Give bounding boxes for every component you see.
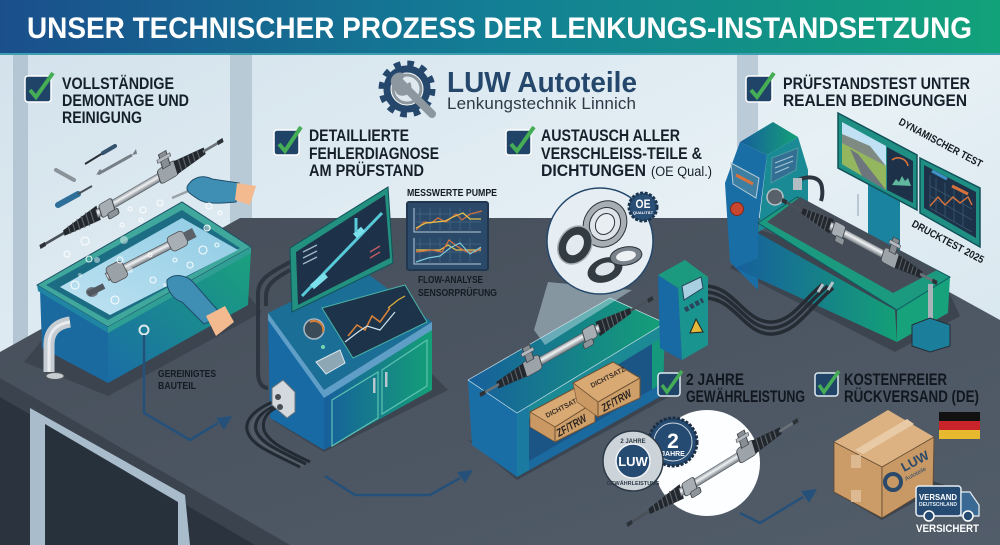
arrow: warranty to shipping [740,489,817,523]
logo wordmark: LUW Autoteile [447,67,637,99]
support stand [912,284,950,352]
illustration: workbench [468,278,672,480]
badge: OE quality: QUALITÄT [633,210,654,215]
text block: DICHTUNGEN [541,161,646,180]
bench right side [517,323,665,477]
text block: REALEN BEDINGUNGEN [783,91,967,110]
console screen [322,285,427,358]
text block: GEWÄHRLEISTUNG [686,387,805,406]
badge: 2 years: 2 [667,430,679,453]
gloved hand in water [167,276,234,336]
water [60,218,238,315]
illustration: disassembled steering rack [34,121,226,258]
icon: checkbox [746,73,774,102]
title bar [0,0,1000,55]
bubbles [64,200,222,304]
parts box: DICHTSATZ [590,366,627,390]
monitor stand [868,180,900,280]
label: flow analysis: FLOW-ANALYSE [418,274,483,286]
illustration: monitors on test bench [838,113,986,266]
pillar: right [737,55,758,225]
arrow: tank to diagnostics [140,326,232,440]
bench top [468,298,665,413]
icon: checkbox [815,371,839,396]
tank rim [37,202,251,327]
steering rack [621,400,801,536]
parts box [573,362,640,417]
chart panel: pump values [407,187,497,299]
box logo [885,447,932,490]
text block: AUSTAUSCH ALLER [541,126,680,145]
loose fitting [86,286,104,297]
illustration: hydraulic pump unit [658,260,708,360]
bench body [735,233,897,342]
box logo: Autoteile [904,466,928,483]
text block: FEHLERDIAGNOSE [309,144,439,163]
cables [247,400,310,467]
badge: OE quality [629,193,657,221]
text block: 2 JAHRE [686,370,744,389]
spindle [767,189,783,205]
badge: OE quality: OE [636,197,650,211]
icon: German flag [939,412,980,439]
parts box: DICHTSATZ [545,396,582,420]
gauge [304,319,324,339]
bench left side [468,380,517,477]
arrow: diagnostics to workbench [325,470,473,495]
icon: delivery truck [916,486,979,535]
gauge arrow [857,194,859,216]
icon: bearing [574,193,636,255]
text block: (OE Qual.) [651,164,712,179]
pillar: left [13,55,28,367]
step 6: return shipping label [815,370,979,406]
logo: LUW Autoteile [382,64,637,114]
step 2: label [274,126,439,180]
label: pressure test: DRUCKTEST 2025 [910,218,986,266]
badge: 2 years: JAHRE [661,451,685,458]
badge: LUW warranty: 2 JAHRE [620,439,646,445]
parts box: ZF/TRW [554,412,590,440]
pillar: centre left [230,55,252,245]
tower screens [731,163,759,198]
illustration: tools above tank [56,146,137,205]
hose connectors [818,282,833,292]
icon: checkbox [506,127,534,155]
tower top [740,122,798,155]
label: insured: VERSICHERT [916,523,979,535]
label: pump readings: MESSWERTE PUMPE [407,187,497,199]
label: flow analysis: SENSORPRÜFUNG [418,286,497,299]
badge: LUW warranty: LUW [618,454,649,469]
console doors [332,340,427,446]
badge: LUW warranty [603,431,663,491]
tank side left [40,290,108,383]
monitor: pressure test [920,158,980,247]
label: dynamic test: DYNAMISCHER TEST [897,116,985,171]
tower right face [758,137,808,232]
badge: LUW warranty: GEWÄHRLEISTUNG [607,480,659,487]
label: cleaned component: BAUTEIL [158,380,196,392]
text block: VOLLSTÄNDIGE [62,74,174,93]
label: cleaned component: GEREINIGTES [158,368,216,380]
step 5: warranty label [658,370,805,406]
warranty: highlight and rack [603,400,801,536]
hoses to pump [705,284,833,334]
tower left face [725,142,767,290]
coupling hose [795,177,822,201]
parts box [530,388,595,442]
small panel [316,350,345,374]
callout: wear parts magnifier [547,188,657,294]
illustration: cleaning tank [24,200,262,396]
spotlight beam [534,282,632,345]
box logo: LUW [898,447,932,475]
monitor [290,187,393,312]
step 3: label [506,126,712,180]
logo tagline: Lenkungstechnik Linnich [447,94,636,113]
connector box [272,380,295,418]
submerged rack part [103,224,198,285]
text block: KOSTENFREIER [844,370,947,389]
workshop floor [0,218,1000,545]
icon: delivery truck: VERSAND [919,492,957,502]
parts box: ZF/TRW [599,387,635,415]
red button [730,202,744,216]
icon: seal small [584,244,643,287]
workbench front edge and window [0,378,290,545]
drain pipe [46,322,70,380]
steering rack on bench [474,278,656,406]
bench top [758,197,950,310]
hoses behind station [258,262,290,388]
console sides [268,313,324,450]
illustration: shipping box [834,410,945,520]
line charts [407,202,488,270]
illustration: diagnostic station [247,187,448,467]
illustration: gloved hand with tool [172,177,256,205]
text block: VERSCHLEISS-TEILE & [541,144,702,163]
step 1: label [25,73,189,127]
text block: PRÜFSTANDSTEST UNTER [783,74,970,93]
tank side right [108,250,251,383]
icon: gear and wrench [382,64,432,114]
steering rack on bench [779,180,943,294]
illustration: test bench with hoses [705,122,960,352]
text block: AM PRÜFSTAND [309,161,424,180]
icon: checkbox [658,371,682,396]
step 4: label [746,73,970,110]
badge: 2 years [649,418,697,466]
text block: DETAILLIERTE [309,126,409,145]
icon: checkbox [25,73,53,102]
icon: seal large [551,220,599,270]
text block: DEMONTAGE UND [62,91,189,110]
icon: checkbox [274,127,301,155]
monitor: driving simulation [838,113,917,210]
icon: delivery truck: DEUTSCHLAND [919,502,957,508]
text block: REINIGUNG [62,108,142,127]
